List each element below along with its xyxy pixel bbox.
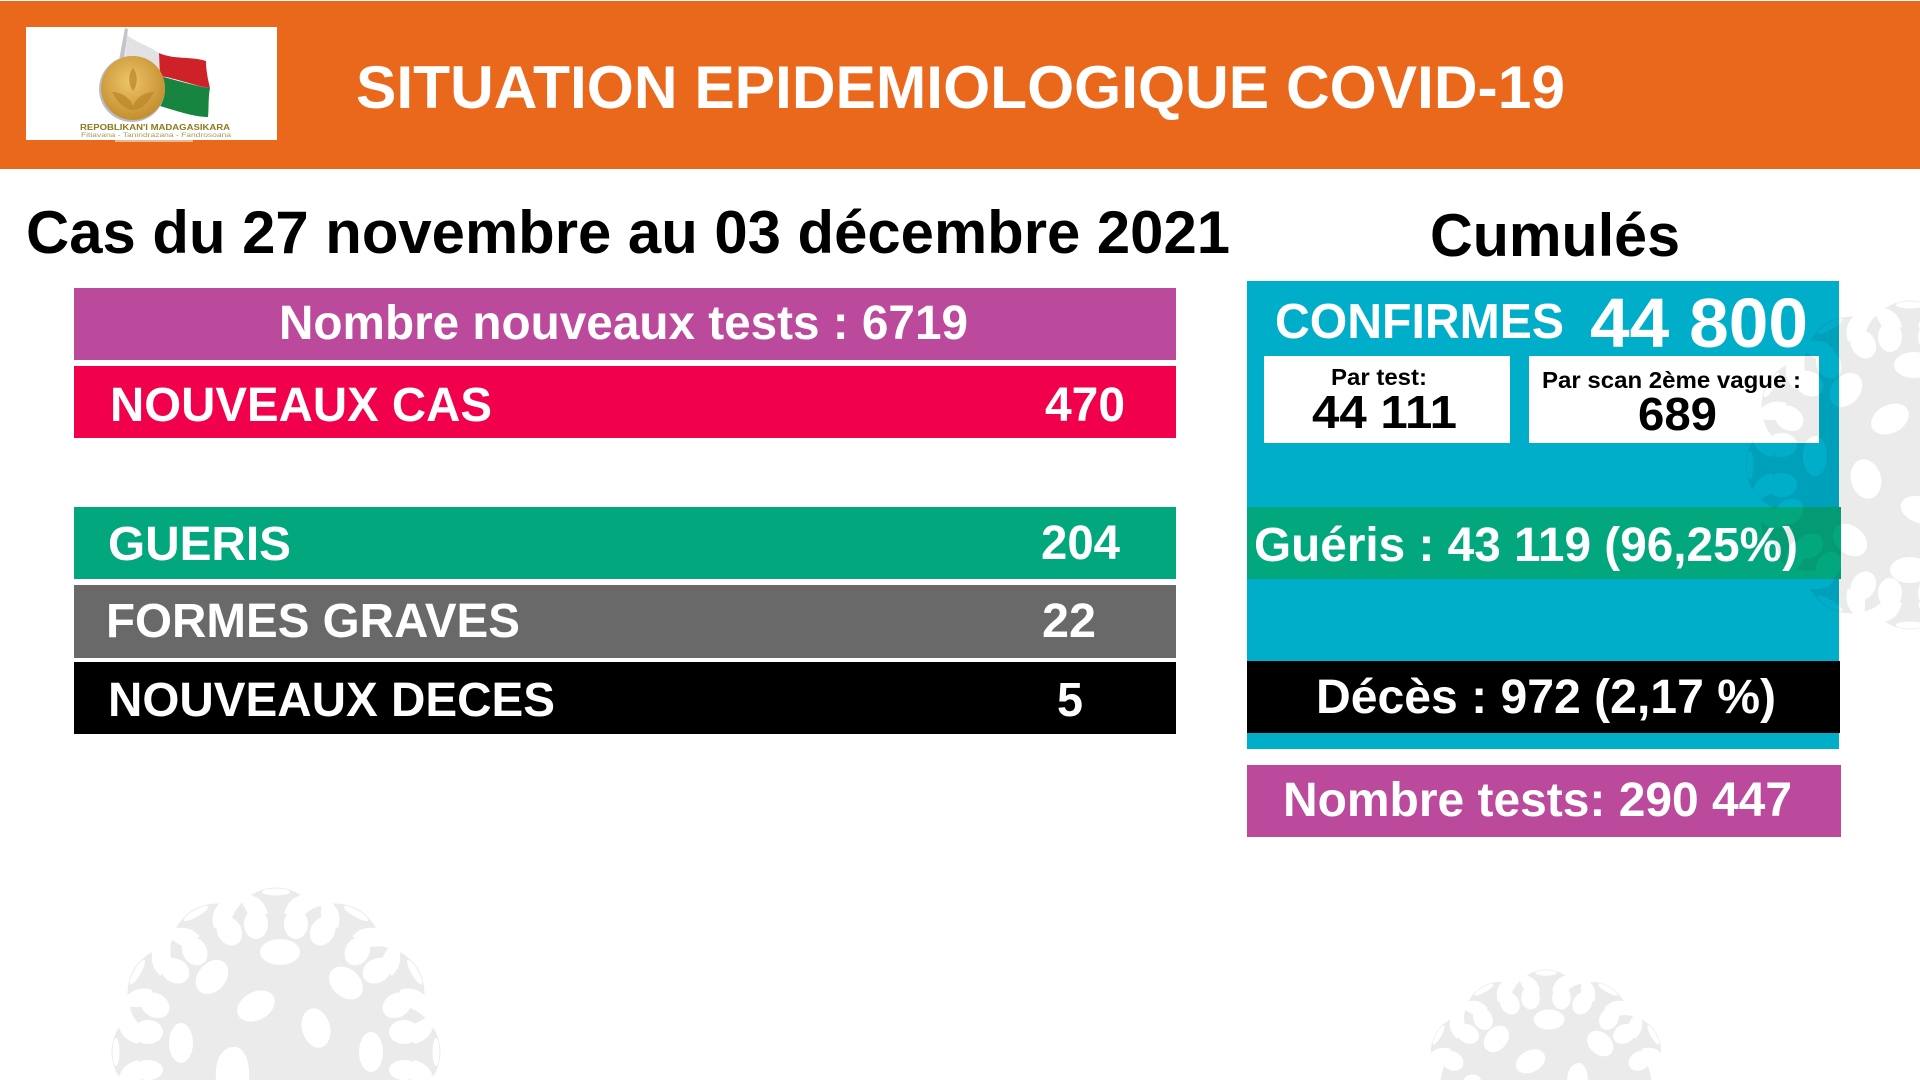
logo: Repoblikan'i Madagasikara xyxy=(26,27,277,142)
logo: Repoblikan'i Madagasikara: Fitiavana - Tanindrazana - Fandrosoana xyxy=(81,133,232,139)
bar: severe forms: 22 xyxy=(1042,595,1096,648)
bar: cumulative deaths xyxy=(1247,661,1840,733)
bar: cumulative recovered: Guéris : 43 119 (96,25%) xyxy=(1254,519,1798,572)
header band xyxy=(0,1,1920,169)
box: by scan: Par scan 2ème vague : xyxy=(1542,367,1801,393)
bar: cumulative recovered xyxy=(1247,507,1841,579)
confirmed total: 44 800 xyxy=(1590,284,1808,362)
background virus: bottom left xyxy=(112,888,440,1080)
panel: cumulative xyxy=(1247,281,1841,749)
bar: new tests xyxy=(74,288,1176,360)
logo: Repoblikan'i Madagasikara: REPOBLIKAN'I MADAGASIKARA xyxy=(80,123,230,132)
bar: new deaths: NOUVEAUX DECES xyxy=(108,674,555,727)
bar: severe forms xyxy=(74,585,1176,658)
heading: weekly cases: Cas du 27 novembre au 03 décembre 2021 xyxy=(26,199,1230,266)
bar: cumulative tests xyxy=(1247,765,1841,837)
bar: cumulative deaths: Décès : 972 (2,17 %) xyxy=(1316,671,1776,724)
bar: new cases xyxy=(74,366,1176,438)
confirmed label: CONFIRMES xyxy=(1275,295,1564,349)
bar: new deaths: 5 xyxy=(1057,674,1083,727)
bar: new cases: 470 xyxy=(1045,379,1125,432)
background virus: right, overlapping panel xyxy=(1746,300,1920,630)
bar: severe forms: FORMES GRAVES xyxy=(106,595,520,648)
box: by scan xyxy=(1529,356,1819,443)
box: by test: Par test: xyxy=(1331,364,1427,390)
background virus: bottom right xyxy=(1431,970,1661,1080)
box: by scan: 689 xyxy=(1638,388,1717,440)
bar: recovered xyxy=(74,507,1176,579)
bar: recovered: 204 xyxy=(1041,517,1120,570)
bar: cumulative tests: Nombre tests: 290 447 xyxy=(1283,774,1792,827)
title: SITUATION EPIDEMIOLOGIQUE COVID-19 xyxy=(356,54,1565,121)
bar: new cases: NOUVEAUX CAS xyxy=(110,379,492,432)
bar: new tests: Nombre nouveaux tests : 6719 xyxy=(279,297,968,350)
box: by test xyxy=(1264,356,1510,443)
bar: new deaths xyxy=(74,662,1176,734)
box: by test: 44 111 xyxy=(1312,386,1457,438)
heading: cumulative: Cumulés xyxy=(1430,202,1680,269)
bar: recovered: GUERIS xyxy=(108,518,291,571)
